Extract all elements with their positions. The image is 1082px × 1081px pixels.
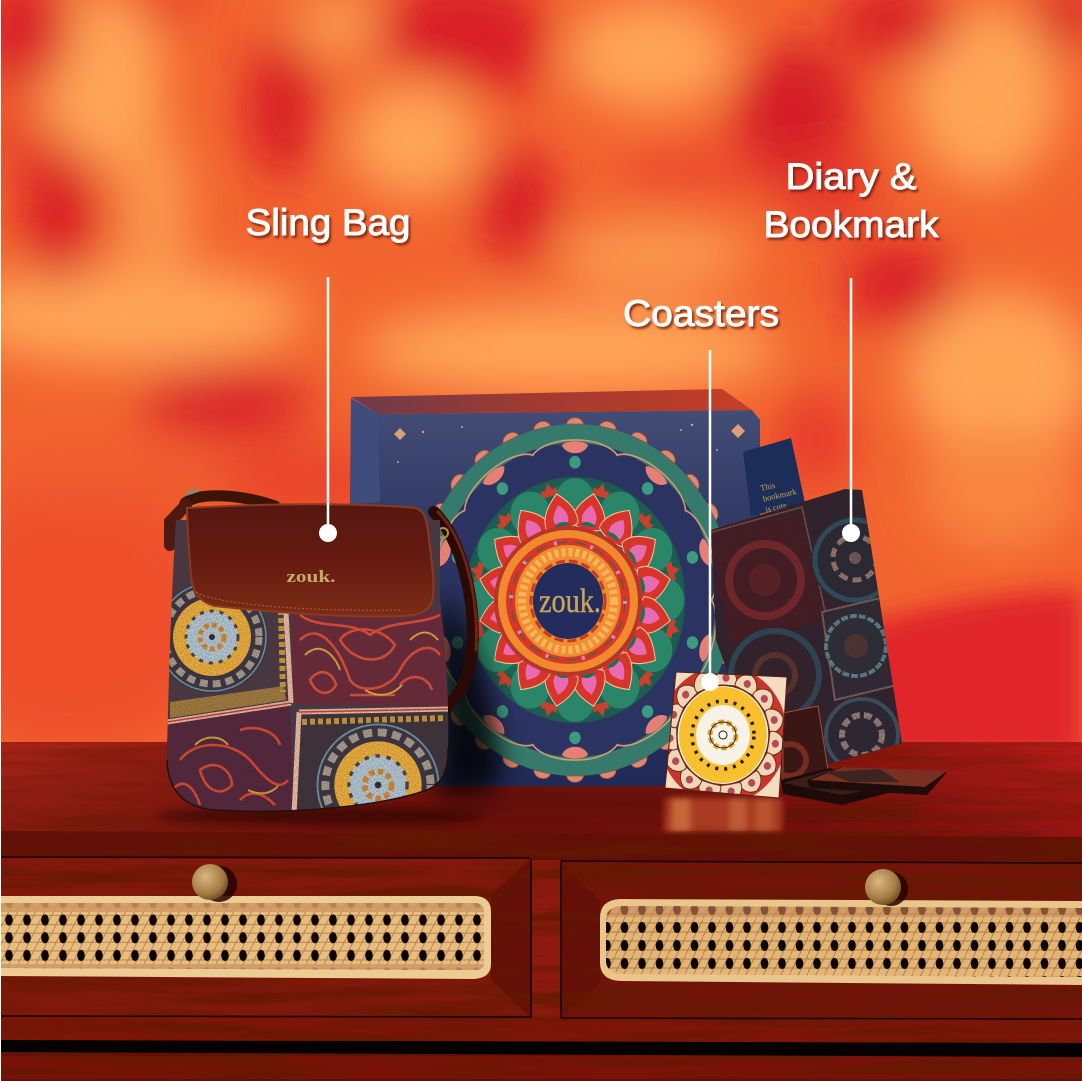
callout: Sling Bag <box>246 202 410 542</box>
callout: Coasters <box>623 293 779 691</box>
box corner ornaments <box>394 424 745 463</box>
label: Sling Bag: Sling Bag <box>246 202 410 243</box>
label: Diary and Bookmark: Bookmark <box>764 204 939 245</box>
diary tile: lower right medallion <box>826 699 898 771</box>
box logo: zouk. <box>539 583 601 620</box>
bookmark text: bookmark <box>762 486 798 504</box>
box left bevel <box>350 398 380 505</box>
box mandala artwork <box>435 417 724 783</box>
diary tile: lower left medallion <box>731 631 819 719</box>
bookmark text <box>759 475 801 514</box>
gift box <box>350 389 760 800</box>
bookmark text: This <box>759 480 776 493</box>
cabinet rails and drawers wood <box>1 831 1082 1081</box>
cabinet front <box>1 831 1082 1081</box>
label: Coasters: Coasters <box>623 293 779 334</box>
leader line: Diary and Bookmark <box>850 278 852 533</box>
small coaster behind <box>774 706 828 780</box>
right brass knob <box>865 869 908 906</box>
bag buckle <box>186 490 198 494</box>
diary tile: right medallion <box>822 597 897 700</box>
bag panel: bottom right medallion <box>297 712 448 810</box>
bookmark text: is cute. <box>764 499 790 514</box>
diary tile: red <box>705 512 825 645</box>
marker dot: Sling Bag <box>319 524 337 542</box>
bag panel: top left medallion <box>169 585 286 718</box>
reflection under box <box>470 786 665 816</box>
reflection under coaster <box>664 798 915 832</box>
label: Diary and Bookmark: Diary & <box>786 156 917 197</box>
bag panel: bottom left paisley <box>165 704 294 812</box>
box front face <box>350 398 760 786</box>
leader line: Sling Bag <box>327 277 329 533</box>
left brass knob <box>192 864 237 902</box>
bag flap <box>187 504 433 616</box>
bag panel: top right paisley <box>292 610 448 706</box>
diary tile: upper medallion <box>811 516 879 602</box>
shadow of bag on box <box>440 590 500 800</box>
label: Diary and Bookmark <box>764 156 939 245</box>
marker dot: Coasters <box>701 673 719 691</box>
bookmark <box>743 438 805 516</box>
front coaster <box>664 672 788 798</box>
bag logo: zouk. <box>286 567 336 586</box>
diary <box>711 489 902 770</box>
bag woven border stripes <box>167 612 448 815</box>
leader line: Coasters <box>709 350 711 682</box>
table top <box>1 742 1082 842</box>
sling bag <box>164 488 479 812</box>
bag shadow on table <box>155 807 485 825</box>
right cane panel <box>600 899 1082 985</box>
stacked coasters <box>781 767 947 805</box>
bag body <box>166 520 449 812</box>
left cane panel <box>1 896 491 979</box>
callout: Diary and Bookmark <box>764 156 939 542</box>
marker dot: Diary and Bookmark <box>842 524 860 542</box>
bag strap <box>170 496 476 708</box>
box lid <box>351 389 752 414</box>
background: blurred orange and red wall <box>0 0 1082 760</box>
